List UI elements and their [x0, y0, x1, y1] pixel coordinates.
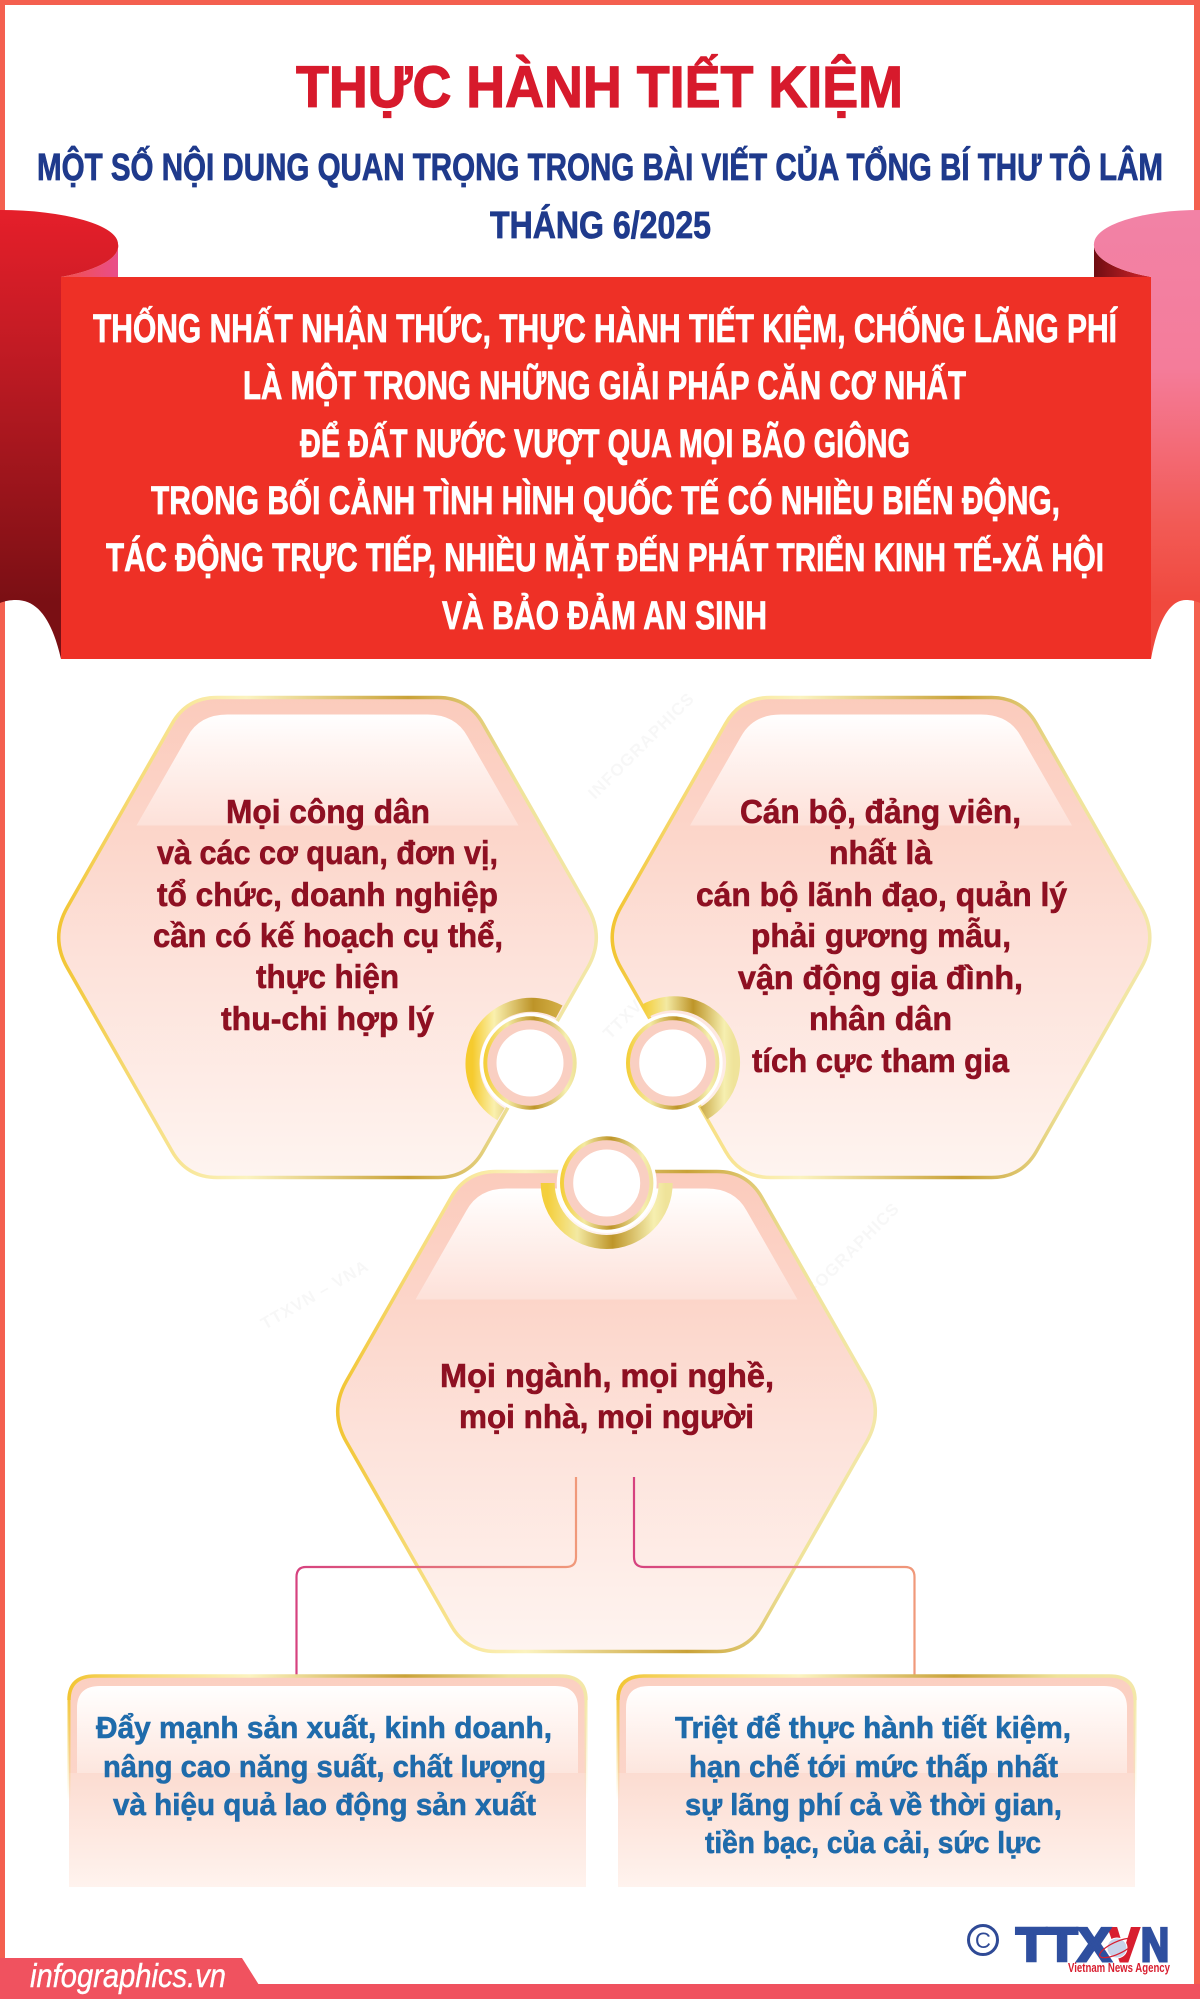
panel: red banner	[61, 277, 1151, 659]
text: left box: và hiệu quả lao động sản xuất	[113, 1787, 536, 1822]
text: right box	[675, 1710, 1071, 1860]
ribbon: left fold	[0, 210, 118, 659]
text: officials	[696, 793, 1068, 1079]
icon: copyright	[968, 1926, 998, 1954]
title: THỰC HÀNH TIẾT KIỆM	[296, 55, 903, 120]
text: officials: Cán bộ, đảng viên,	[740, 793, 1021, 830]
ribbon: right fold	[1094, 210, 1200, 659]
banner text: LÀ MỘT TRONG NHỮNG GIẢI PHÁP CĂN CƠ NHẤT	[243, 362, 966, 408]
footer site name: infographics.vn	[30, 1957, 226, 1994]
text: everyone: mọi nhà, mọi người	[459, 1398, 754, 1435]
text: left box: nâng cao năng suất, chất lượng	[103, 1749, 546, 1784]
watermarks: INFOGRAPHICS	[584, 689, 698, 803]
text: right box: Triệt để thực hành tiết kiệm,	[675, 1710, 1071, 1745]
text: everyone: Mọi ngành, mọi nghề,	[440, 1357, 774, 1394]
watermarks	[258, 689, 903, 1333]
banner text: ĐỂ ĐẤT NƯỚC VƯỢT QUA MỌI BÃO GIÔNG	[300, 419, 910, 466]
text: left box: Đẩy mạnh sản xuất, kinh doanh,	[96, 1710, 552, 1745]
text: right box: tiền bạc, của cải, sức lực	[705, 1825, 1041, 1860]
footer bar	[0, 1957, 1200, 1999]
text: citizens: thu-chi hợp lý	[221, 1000, 435, 1037]
logo: TTXVN: TTX	[1016, 1918, 1111, 1971]
panel: left box	[68, 1676, 588, 1887]
text: officials: vận động gia đình,	[738, 959, 1023, 996]
text: officials: tích cực tham gia	[752, 1042, 1010, 1079]
watermarks: TTXVN – VNA	[258, 1256, 372, 1333]
text: citizens: thực hiện	[256, 958, 399, 995]
panel: hexagon citizens	[59, 698, 596, 1178]
arrow: connector to left box	[296, 1477, 576, 1676]
panel: hexagon everyone	[338, 1172, 875, 1652]
ring: bottom hexagon	[548, 1133, 666, 1242]
banner text: VÀ BẢO ĐẢM AN SINH	[442, 592, 767, 638]
text: citizens: tổ chức, doanh nghiệp	[157, 876, 498, 913]
text: citizens: và các cơ quan, đơn vị,	[157, 834, 498, 871]
watermarks: TTXVN	[599, 986, 656, 1043]
text: everyone	[440, 1357, 774, 1435]
ring: right hexagon	[623, 1003, 733, 1113]
panel: right box	[616, 1676, 1136, 1887]
text: officials: nhân dân	[809, 1000, 952, 1037]
text: officials: cán bộ lãnh đạo, quản lý	[696, 876, 1068, 913]
text: citizens	[153, 793, 503, 1037]
logo: TTXVN	[1016, 1918, 1171, 1975]
text: officials: phải gương mẫu,	[751, 917, 1011, 954]
panel: hexagon officials	[612, 698, 1150, 1178]
text: citizens: cần có kế hoạch cụ thể,	[153, 917, 503, 954]
watermarks: INFOGRAPHICS	[789, 1199, 903, 1313]
text: right box: hạn chế tới mức thấp nhất	[689, 1749, 1058, 1784]
logo: TTXVN: V	[1109, 1918, 1140, 1971]
text: citizens: Mọi công dân	[226, 793, 430, 830]
subtitle: THÁNG 6/2025	[490, 203, 711, 247]
text: left box	[96, 1710, 552, 1822]
subtitle	[37, 144, 1163, 247]
text: right box: sự lãng phí cả về thời gian,	[685, 1787, 1062, 1822]
icon: copyright: C	[975, 1928, 991, 1953]
ring: left hexagon	[472, 1005, 580, 1114]
arrow: connector to right box	[634, 1477, 914, 1676]
text: officials: nhất là	[829, 834, 933, 871]
logo: TTXVN: N	[1141, 1918, 1169, 1971]
banner text	[93, 305, 1118, 638]
